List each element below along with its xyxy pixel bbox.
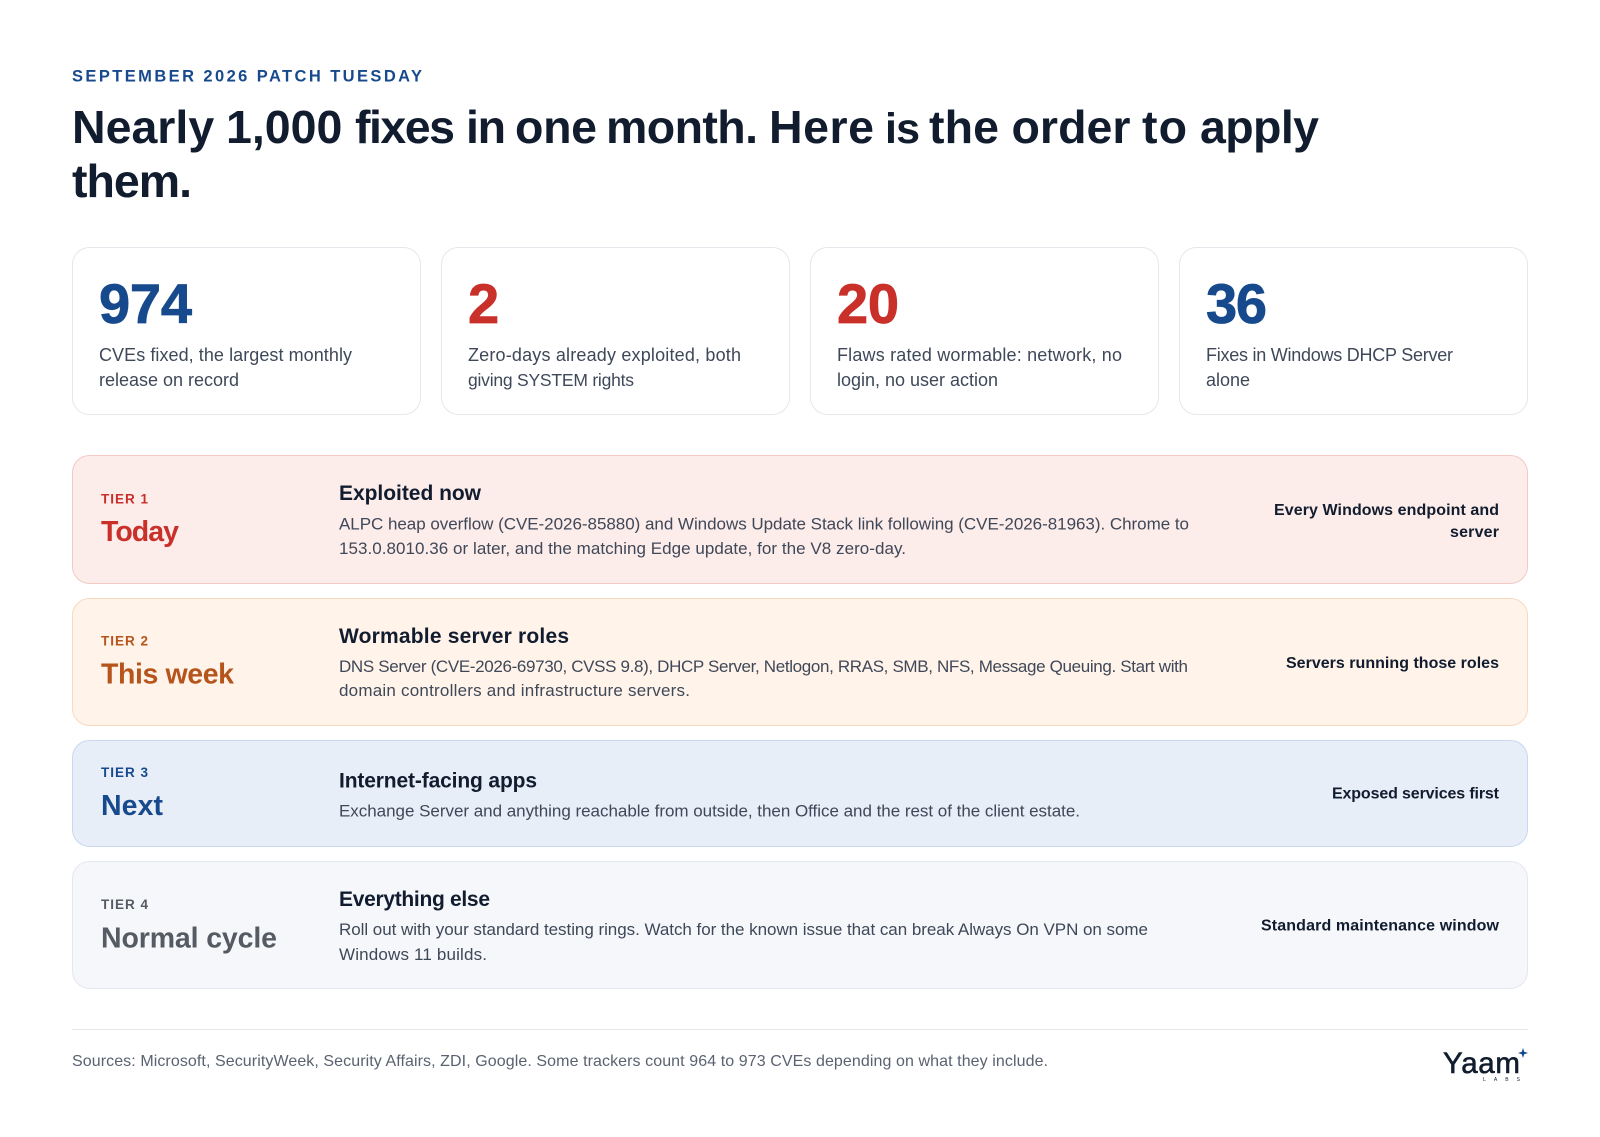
tier 1 panel [72,456,1528,584]
icon: logo star [1518,1048,1528,1058]
title: one [515,101,597,153]
tier 4 label: TIER 4 [101,897,148,912]
tier 1 heading: Exploited now [339,482,482,505]
tier 3 description: Exchange Server and anything reachable from outside, then Office and the rest of the client estate. [339,802,1080,820]
stat label [1206,345,1453,390]
tier 1 description: ALPC heap overflow (CVE-2026-85880) and Windows Update Stack link following (CVE-2026-81963). Chrome to [339,514,1189,534]
tier 3 scope: Exposed services first [1332,786,1500,802]
tier 4 timing: Normal cycle [101,922,277,954]
title: 1,000 [226,101,342,153]
stat number: 974 [99,272,192,335]
stat label: alone [1206,370,1250,390]
title: the [929,101,999,153]
stat label: Zero-days already exploited, both [468,345,741,365]
tier 2 panel [72,598,1528,726]
title: apply [1200,101,1319,153]
tier 1 scope: server [1450,524,1499,541]
stat label: release on record [99,370,239,390]
stat number: 20 [837,272,899,335]
title: Here [769,101,874,153]
tier 1 timing: Today [101,516,179,548]
stat card: 2 zero-days [442,248,790,414]
tier 1 description [339,514,1189,558]
eyebrow: SEPTEMBER 2026 PATCH TUESDAY [72,68,422,86]
sources footnote: Sources: Microsoft, SecurityWeek, Security Affairs, ZDI, Google. Some trackers count 964 to 973 CVEs depending on what they include. [72,1053,1048,1070]
tier 1 scope [1274,502,1499,541]
tier 3 timing: Next [101,790,164,822]
tier 2 label: TIER 2 [101,634,148,648]
tier 2 heading: Wormable server roles [339,625,569,648]
tier 4 panel [72,862,1528,988]
title: order [1012,101,1130,153]
stat label: CVEs fixed, the largest monthly [99,345,352,365]
logo: Yaam Labs: LABS [1483,1077,1521,1083]
tier 4 description [339,920,1148,964]
stat label [468,345,741,390]
tier 3 heading: Internet-facing apps [339,770,537,792]
tier 3 panel [72,740,1528,846]
tier 1 label: TIER 1 [101,492,148,506]
tier 2 description: DNS Server (CVE-2026-69730, CVSS 9.8), DHCP Server, Netlogon, RRAS, SMB, NFS, Message Queuing. Start with [339,657,1188,676]
tier 4 description: Roll out with your standard testing rings. Watch for the known issue that can break Always On VPN on some [339,920,1148,939]
title: fixes [355,101,455,153]
tier 2 description: domain controllers and infrastructure servers. [339,681,690,700]
tier 4 scope: Standard maintenance window [1261,918,1500,934]
logo: Yaam Labs: Yaam [1443,1047,1520,1080]
tier 1 scope: Every Windows endpoint and [1274,502,1499,519]
stat label [837,345,1122,390]
stat label: Fixes in Windows DHCP Server [1206,345,1453,365]
tier 3 label: TIER 3 [101,765,148,780]
tier 4 description: Windows 11 builds. [339,945,487,964]
title: in [466,101,506,153]
stat label [99,345,352,390]
stat card: 36 DHCP [1180,248,1528,414]
stat card: 20 wormable [810,248,1158,414]
title [72,101,1319,207]
stat card: 974 CVEs [72,248,420,414]
title: to [1142,101,1187,153]
stat label: Flaws rated wormable: network, no [837,345,1122,365]
title: Nearly [72,101,214,153]
stat number: 2 [468,272,499,335]
tier 2 description [339,657,1188,700]
title: month. [606,101,758,153]
tier 2 scope: Servers running those roles [1286,655,1499,672]
title: them. [72,155,192,207]
tier 4 heading: Everything else [339,888,490,911]
stat label: login, no user action [837,370,998,390]
title: is [885,105,920,153]
tier 2 timing: This week [101,658,234,690]
tier 1 description: 153.0.8010.36 or later, and the matching Edge update, for the V8 zero-day. [339,539,906,558]
stat number: 36 [1206,272,1267,335]
stat label: giving SYSTEM rights [468,370,634,390]
